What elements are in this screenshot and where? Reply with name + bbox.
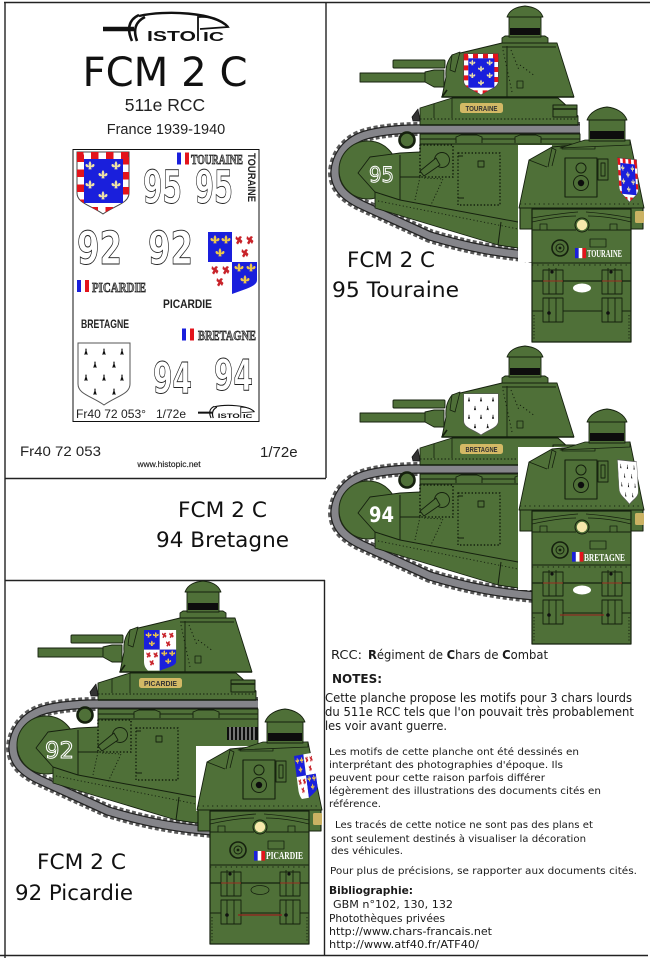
nameplate xyxy=(460,103,503,113)
subtitle: country and dates: France 1939-1940 xyxy=(107,122,225,138)
abbreviation: RCC: Régiment de Chars de Combat xyxy=(368,647,548,662)
front flag and name: BRETAGNE xyxy=(584,553,625,564)
bibliography xyxy=(329,884,493,951)
caption: 95 Touraine: 95 Touraine xyxy=(332,278,459,303)
decal: Touraine vertical name: TOURAINE xyxy=(245,153,257,202)
decal: number 92: 92 xyxy=(77,222,122,275)
notes: intro paragraph: Cette planche propose les motifs pour 3 chars lourds xyxy=(325,690,632,705)
decal: Picardie shield xyxy=(208,232,257,294)
caption: 94 Bretagne: 94 Bretagne xyxy=(156,528,289,553)
decal sheet scale: 1/72e xyxy=(156,407,186,421)
hull oval xyxy=(251,886,269,894)
caption: 95 Touraine xyxy=(332,248,459,303)
decal: Bretagne flag and name: BRETAGNE xyxy=(198,329,256,344)
panel: decal sheet xyxy=(73,150,259,422)
hull oval xyxy=(573,284,591,292)
decal: number 95 xyxy=(143,161,233,214)
website: www.histopic.net xyxy=(136,459,201,469)
notes: motifs paragraph xyxy=(329,746,601,810)
red line xyxy=(238,914,282,916)
reference code: Fr40 72 053 xyxy=(20,443,101,459)
notes: plans paragraph: des véhicules. xyxy=(331,845,403,857)
notes: intro paragraph xyxy=(325,690,634,733)
tank 95 Touraine: side view xyxy=(335,6,580,256)
front flag and name: TOURAINE xyxy=(587,249,622,260)
front flag and name xyxy=(575,248,622,260)
tank 92 Picardie: side view xyxy=(13,581,258,831)
nameplate: TOURAINE xyxy=(466,106,498,113)
decal: Picardie name: PICARDIE xyxy=(163,299,212,311)
abbreviation: RCC: RCC: xyxy=(331,647,362,662)
hull number: 92 xyxy=(45,739,74,764)
decal sheet reference: Fr40 72 053° xyxy=(76,407,146,421)
hull number: 95 xyxy=(369,163,394,187)
decal: Bretagne shield xyxy=(78,343,130,405)
caption: 92 Picardie: 92 Picardie xyxy=(15,881,133,906)
decal: number 95: 95 xyxy=(143,161,182,214)
logo: Histopic xyxy=(103,13,228,45)
engine vents xyxy=(227,727,258,740)
nameplate xyxy=(460,444,503,454)
notes heading: NOTES: xyxy=(332,671,382,686)
notes: motifs paragraph: peuvent pour cette raison parfois différer xyxy=(329,772,546,784)
tank 92 Picardie: front view xyxy=(196,709,322,947)
decal: number 92 xyxy=(77,222,193,275)
notes: motifs paragraph: interprétant des photographies d'époque. Ils xyxy=(329,759,563,771)
subtitle: unit: 511e RCC xyxy=(125,95,205,115)
notes: intro paragraph: les voir avant guerre. xyxy=(325,718,447,733)
nameplate xyxy=(139,678,182,688)
front shield xyxy=(294,753,319,799)
caption: 92 Picardie xyxy=(15,850,133,906)
notes: further reading: Pour plus de précisions, se rapporter aux documents cités. xyxy=(330,865,637,877)
shield on turret xyxy=(144,630,176,671)
notes: intro paragraph: du 511e RCC tels que l'on pouvait très probablement xyxy=(325,704,634,719)
decal: number 94: 94 xyxy=(214,351,253,401)
decal: number 94 xyxy=(153,351,253,404)
caption: 94 Bretagne xyxy=(156,498,289,553)
tank 94 Bretagne: side view xyxy=(335,346,580,596)
title: FCM 2 C xyxy=(82,50,248,96)
tank 94 Bretagne: front view xyxy=(518,409,648,644)
front shield xyxy=(617,157,640,204)
front flag and name: PICARDIE xyxy=(266,851,303,862)
hull number: 94 xyxy=(369,503,394,527)
notes: motifs paragraph: référence. xyxy=(329,798,381,810)
decal: number 95: 95 xyxy=(195,161,233,214)
hull oval xyxy=(573,586,591,594)
notes: motifs paragraph: Les motifs de cette planche ont été dessinés en xyxy=(329,746,579,758)
nameplate: BRETAGNE xyxy=(466,447,498,454)
caption: 92 Picardie: FCM 2 C xyxy=(37,850,126,875)
decal: Bretagne name: BRETAGNE xyxy=(81,319,129,331)
decal sheet mini logo xyxy=(198,405,254,420)
decal: Bretagne flag and name xyxy=(182,328,256,344)
notes: plans paragraph xyxy=(331,819,593,857)
tank 95 Touraine: front view xyxy=(518,107,644,342)
bibliography: Photothèques privées xyxy=(329,912,445,925)
shield on turret xyxy=(464,394,498,435)
decal: number 94: 94 xyxy=(153,354,192,404)
front shield xyxy=(617,460,639,505)
front flag and name xyxy=(572,552,625,564)
bibliography: http://www.chars-francais.net xyxy=(329,925,493,938)
red line xyxy=(560,614,604,616)
decal: Touraine flag and name: TOURAINE xyxy=(191,153,243,168)
decal: Picardie flag and name xyxy=(77,280,146,296)
nameplate: PICARDIE xyxy=(144,681,177,688)
front flag and name xyxy=(254,851,303,862)
caption: 95 Touraine: FCM 2 C xyxy=(347,248,435,273)
decal: number 92: 92 xyxy=(148,222,193,275)
shield on turret xyxy=(463,53,499,96)
scale: 1/72e xyxy=(260,444,298,461)
notes: plans paragraph: sont seulement destinés à visualiser la décoration xyxy=(331,833,586,845)
caption: 94 Bretagne: FCM 2 C xyxy=(178,498,267,523)
notes: plans paragraph: Les tracés de cette notice ne sont pas des plans et xyxy=(335,819,593,831)
decal: Touraine shield xyxy=(76,151,130,215)
decal: Touraine flag and name xyxy=(177,152,243,168)
bibliography: GBM n°102, 130, 132 xyxy=(333,898,453,911)
decal: Picardie flag and name: PICARDIE xyxy=(92,281,146,296)
bibliography: http://www.atf40.fr/ATF40/ xyxy=(329,938,479,951)
notes: motifs paragraph: légèrement des illustrations des documents cités en xyxy=(329,785,601,797)
bibliography: Bibliographie: xyxy=(329,884,413,897)
